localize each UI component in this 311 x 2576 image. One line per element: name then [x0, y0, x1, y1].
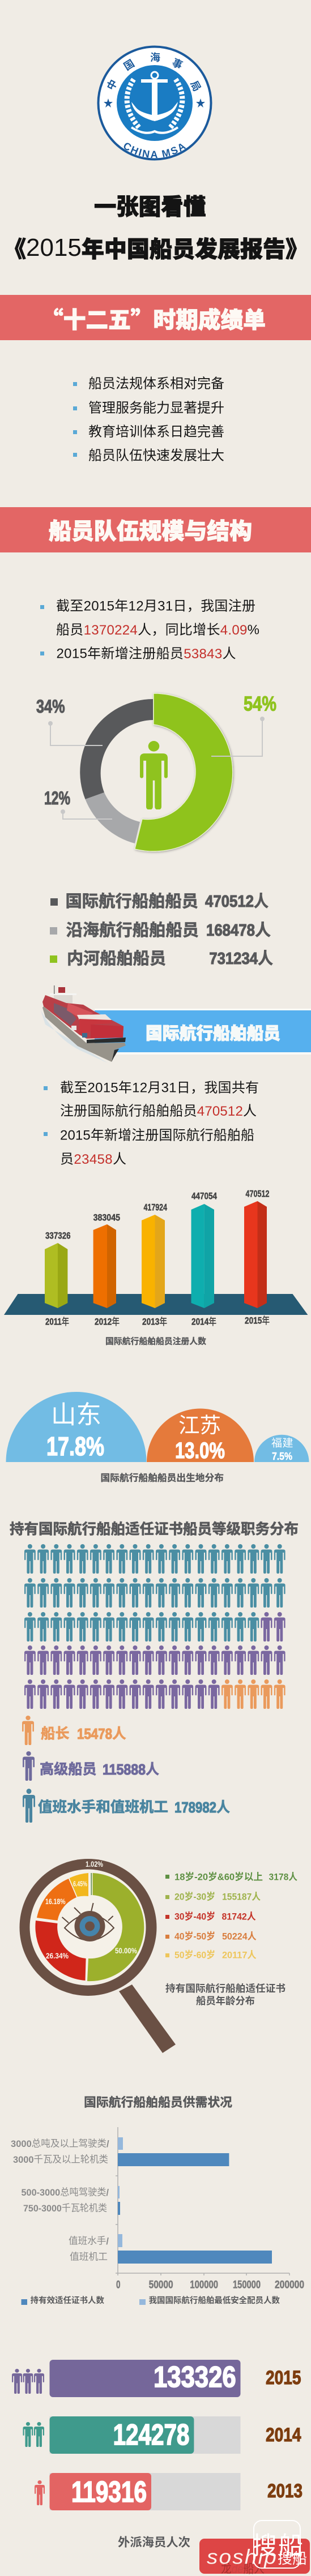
title line 2: 《2015年中国船员发展报告》: [3, 231, 308, 264]
section banner: international seafarers: 国际航行船舶船员: [146, 1019, 280, 1044]
x-axis labels: 150000: [233, 2279, 261, 2291]
watermark badge: soship: [207, 2545, 278, 2569]
legend: officers: 115888: [103, 1761, 146, 1778]
percentage labels: 50.00%: [115, 1946, 137, 1955]
bar: 2011: [45, 1243, 67, 1308]
chart caption: 国际航行船舶船员出生地分布: [101, 1472, 224, 1483]
bar values: 447054: [191, 1191, 217, 1201]
icon: eye: [62, 1903, 114, 1941]
logo: China MSA emblem: 中: [105, 78, 120, 92]
segment: 16.18%: [37, 1879, 76, 1921]
legend: captains: 15478: [77, 1725, 112, 1742]
legend: age groups: 40岁-50岁: [174, 1931, 215, 1941]
section banner: fleet scale and structure: 船员队伍规模与结构: [49, 513, 252, 546]
legend: watch ratings: 人: [216, 1799, 230, 1815]
heading: supply and demand: 国际航行船舶船员供需状况: [84, 2095, 232, 2109]
watermark badge: 龙de船人: [221, 2562, 265, 2575]
segment: 26.34%: [35, 1921, 86, 1981]
category labels: 3000千瓦及以上轮机类: [13, 2154, 108, 2164]
callout: 12%: [44, 788, 112, 819]
bar chart: registered international seafarers: [4, 1189, 308, 1327]
legend: captains: 人: [112, 1726, 126, 1742]
row 2: [24, 1578, 286, 1608]
legend: watch ratings: [23, 1789, 230, 1823]
magnifier chart: age distribution: [19, 1859, 176, 2053]
logo: China MSA emblem: [97, 45, 212, 161]
bullet list: achievements: 船员队伍快速发展壮大: [88, 448, 224, 463]
legend: seafarer categories: 内河船舶船员: [67, 949, 166, 968]
logo: China MSA emblem: 海: [150, 52, 160, 63]
bar: 2012: [93, 1224, 116, 1308]
legend: age groups: 50岁-60岁: [174, 1949, 215, 1961]
category labels: 750-3000千瓦轮机类: [23, 2203, 107, 2213]
chart caption: age distribution: 持有国际航行船舶适任证书: [165, 1982, 286, 1994]
x-axis labels: 0: [116, 2279, 120, 2291]
legend: age groups: 155187人: [222, 1892, 261, 1902]
semicircle: Fujian: 7.5%: [272, 1451, 292, 1462]
legend: seafarer categories: 人: [255, 921, 271, 940]
text block: international seafarers: [44, 1080, 259, 1167]
bar: dispatched seafarers 2014: [23, 2416, 301, 2454]
section banner: international seafarers: [95, 1009, 311, 1055]
legend: age groups: 20岁-30岁: [174, 1892, 215, 1902]
pictogram: rank distribution: [24, 1544, 286, 1709]
legend: watch ratings: 值班水手和值班机工: [38, 1799, 168, 1815]
bar: dispatched seafarers 2014: 124278: [113, 2419, 189, 2451]
year labels: [45, 1315, 270, 1327]
x-axis labels: [116, 2279, 304, 2291]
legend: age groups: 81742人: [222, 1911, 256, 1922]
legend: supply and demand: [22, 2295, 280, 2305]
title line 1: 一张图看懂: [94, 188, 206, 221]
category labels: 3000总吨及以上驾驶类/: [11, 2138, 109, 2149]
legend: age groups: 50224人: [222, 1931, 257, 1941]
chart caption: age distribution: [165, 1982, 286, 2007]
callout: 54%: [211, 692, 276, 756]
text block: international seafarers: 员23458人: [60, 1151, 126, 1167]
row 4: [24, 1645, 286, 1675]
legend: age groups: [165, 1871, 297, 1961]
logo: China MSA emblem: 事: [171, 57, 184, 71]
bar: dispatched seafarers 2013: 119316: [71, 2476, 147, 2509]
bar chart: supply and demand: [11, 2127, 304, 2291]
legend: captains: 船长: [41, 1726, 69, 1742]
legend: seafarer categories: [50, 892, 273, 968]
text block: international seafarers: 2015年新增注册国际航行船舶船: [60, 1128, 254, 1143]
row 5: [24, 1679, 286, 1709]
percentage labels: [45, 1859, 137, 1960]
callout: 34%: 34%: [36, 696, 65, 717]
semicircle: Jiangsu: 13.0%: [175, 1438, 225, 1463]
text block: registered seafarers: [40, 599, 259, 661]
year labels: 2014年: [191, 1317, 216, 1327]
percentage labels: 1.02%: [86, 1859, 103, 1868]
legend: seafarer categories: 沿海航行船舶船员: [66, 921, 199, 940]
semicircle: Fujian: 福建: [271, 1437, 293, 1449]
bullet list: achievements: 船员法规体系相对完备: [88, 376, 224, 392]
year labels: 2013年: [142, 1317, 167, 1327]
callout: 12%: 12%: [44, 788, 70, 808]
bar: dispatched seafarers 2015: 133326: [154, 2361, 236, 2394]
legend: age groups: 30岁-40岁: [174, 1911, 215, 1922]
bar: dispatched seafarers 2013: [35, 2473, 303, 2510]
legend: supply and demand: 持有效适任证书人数: [31, 2295, 104, 2305]
bar: dispatched seafarers 2014: 2014: [266, 2424, 301, 2446]
percentage labels: 16.18%: [45, 1897, 66, 1906]
year labels: 2015年: [245, 1315, 270, 1326]
donut chart: seafarer structure: [36, 692, 276, 851]
legend: seafarer categories: 国际航行船舶船员: [66, 892, 198, 911]
semicircle: Shandong: [6, 1392, 146, 1462]
segment: 50.00%: [87, 1873, 144, 1981]
legend: age groups: 18岁-20岁&60岁以上: [174, 1871, 263, 1883]
bullet list: achievements: [73, 376, 224, 463]
x-axis labels: 100000: [190, 2279, 218, 2291]
icon: person: [140, 741, 168, 810]
semicircle chart: birthplace distribution: [6, 1392, 309, 1463]
percentage labels: 6.45%: [73, 1879, 87, 1888]
text block: international seafarers: 截至2015年12月31日，我国共有: [60, 1080, 259, 1096]
legend: officers: [23, 1751, 159, 1781]
section banner: achievements: “十二五”时期成绩单: [41, 302, 266, 335]
legend: seafarer categories: 人: [254, 893, 269, 911]
text block: registered seafarers: 2015年新增注册船员53843人: [57, 646, 236, 661]
chart caption: 国际航行船舶船员注册人数: [105, 1336, 206, 1346]
logo: China MSA emblem: 局: [188, 79, 203, 93]
legend: captains: [22, 1716, 126, 1745]
semicircle: Shandong: 17.8%: [46, 1431, 104, 1461]
icon: magnifier handle: [119, 1984, 176, 2053]
category labels: 值班水手/: [69, 2236, 109, 2246]
text block: international seafarers: 注册国际航行船舶船员470512人: [60, 1104, 257, 1118]
category labels: [11, 2138, 109, 2262]
bar: 2013: [142, 1215, 165, 1308]
logo: China MSA emblem: CHINA MSA: [123, 143, 186, 158]
semicircle: Shandong: 山东: [51, 1401, 101, 1429]
bullet list: achievements: 教育培训体系日趋完善: [88, 425, 224, 439]
x-axis labels: 50000: [149, 2279, 173, 2291]
bar: 2015: [244, 1201, 267, 1308]
segment: 6.45%: [69, 1873, 88, 1897]
bar values: 383045: [93, 1212, 120, 1223]
legend: age groups: 20117人: [222, 1949, 257, 1961]
legend: seafarer categories: 470512: [205, 893, 254, 911]
bar: dispatched seafarers 2013: 2013: [267, 2480, 303, 2502]
legend: officers: 高级船员: [40, 1761, 96, 1777]
x-axis labels: 200000: [275, 2279, 304, 2291]
bar values: 337326: [45, 1231, 71, 1241]
bar values: 417924: [144, 1202, 167, 1212]
section banner: fleet scale and structure: [0, 507, 311, 552]
category labels: 500-3000总吨驾驶类/: [22, 2187, 109, 2197]
semicircle: Jiangsu: [147, 1408, 254, 1463]
legend: seafarer categories: 人: [258, 950, 273, 968]
chart caption: dispatched seafarers: 外派海员人次: [118, 2536, 190, 2549]
logo: China MSA emblem: 国: [122, 58, 137, 72]
bar: dispatched seafarers 2015: [12, 2360, 301, 2397]
percentage labels: 26.34%: [46, 1951, 69, 1960]
section banner: achievements: [0, 295, 311, 340]
legend: officers: 人: [146, 1761, 159, 1777]
year labels: 2011年: [45, 1317, 69, 1327]
bar values: 470512: [246, 1189, 270, 1199]
bar: dispatched seafarers 2015: 2015: [266, 2367, 301, 2389]
callout: 54%: 54%: [244, 692, 276, 715]
legend: watch ratings: 178982: [174, 1799, 216, 1816]
watermark badge: 搜船: [278, 2550, 307, 2567]
legend: seafarer categories: 731234: [209, 950, 258, 968]
semicircle: Fujian: [254, 1435, 309, 1462]
icon: container ship: [41, 985, 126, 1063]
bar: 2014: [191, 1204, 214, 1308]
year labels: 2012年: [95, 1317, 120, 1327]
chart caption: age distribution: 船员年龄分布: [196, 1995, 255, 2007]
watermark badge: 搜船: [252, 2532, 303, 2560]
segment: 1.02%: [91, 1873, 92, 1895]
legend: seafarer categories: 168478: [206, 921, 255, 940]
row 3: [24, 1612, 286, 1641]
text block: registered seafarers: 截至2015年12月31日，我国注册: [56, 599, 255, 614]
callout: 34%: [36, 696, 103, 745]
legend: age groups: 3178人: [269, 1871, 297, 1883]
text block: registered seafarers: 船员1370224人，同比增长4.09%: [56, 623, 259, 637]
bar values: [45, 1189, 270, 1241]
category labels: 值班机工: [70, 2252, 108, 2262]
semicircle: Jiangsu: 江苏: [178, 1413, 221, 1437]
bullet list: achievements: 管理服务能力显著提升: [88, 401, 224, 415]
watermark badge: [199, 2521, 310, 2575]
heading: rank distribution: 持有国际航行船舶适任证书船员等级职务分布: [10, 1521, 299, 1537]
row 1: [24, 1544, 286, 1574]
legend: supply and demand: 我国国际航行船舶最低安全配员人数: [149, 2295, 280, 2305]
